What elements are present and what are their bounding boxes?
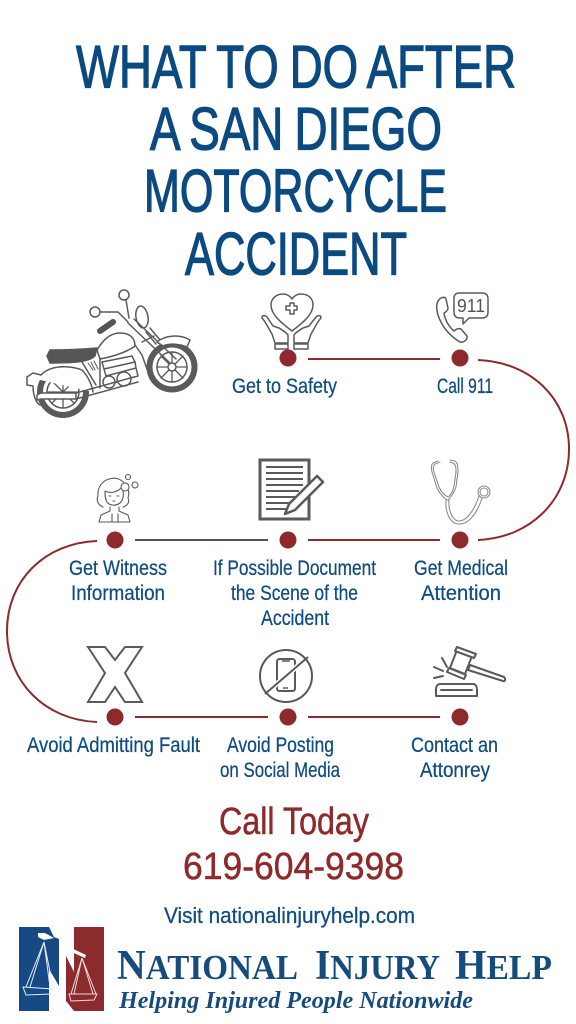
logo: national injury help xyxy=(19,927,552,1014)
label: Get to Safety xyxy=(232,375,337,398)
step: avoid admitting fault xyxy=(27,647,200,757)
step: get witness information xyxy=(69,474,167,605)
node marker xyxy=(280,708,296,726)
label xyxy=(220,734,340,782)
step: get to safety xyxy=(232,294,337,398)
step: avoid posting on social media xyxy=(220,650,340,782)
icon: stethoscope xyxy=(431,460,490,524)
logo wordmark xyxy=(117,943,552,989)
label: on Social Media xyxy=(220,759,340,782)
node marker xyxy=(280,532,296,548)
logo wordmark: INJURY xyxy=(315,943,440,989)
label: If Possible Document xyxy=(213,557,376,580)
node marker xyxy=(106,708,124,726)
logo wordmark: NATIONAL xyxy=(117,943,298,989)
logo wordmark: HELP xyxy=(455,943,552,989)
icon: no phone xyxy=(260,650,312,702)
call to action: Call Today xyxy=(219,801,369,843)
icon: motorcycle xyxy=(27,290,194,415)
icon: hands holding heart xyxy=(262,294,321,349)
title xyxy=(76,34,516,288)
call to action xyxy=(183,801,404,888)
label xyxy=(69,557,167,605)
label xyxy=(411,734,498,782)
label xyxy=(414,557,508,605)
label xyxy=(213,557,376,630)
website link: Visit nationalinjuryhelp.com xyxy=(164,903,415,928)
label: Contact an xyxy=(411,734,498,757)
icon: document and pencil xyxy=(260,460,323,519)
route connector lines xyxy=(7,359,569,722)
node marker xyxy=(280,350,296,366)
label: Accident xyxy=(261,607,329,630)
step: call 911 xyxy=(437,293,493,398)
label: Attonrey xyxy=(420,759,490,782)
label: Avoid Admitting Fault xyxy=(27,734,200,757)
logo mark xyxy=(19,927,104,1011)
label: the Scene of the xyxy=(231,582,358,605)
call to action: 619-604-9398 xyxy=(183,846,404,888)
label: Avoid Posting xyxy=(227,734,334,757)
title: MOTORCYCLE xyxy=(144,158,447,224)
icon: gavel xyxy=(434,647,505,696)
label: Information xyxy=(71,582,165,605)
node marker xyxy=(452,532,468,548)
icon: witness thinking xyxy=(97,474,138,522)
step: document the scene xyxy=(213,460,376,630)
logo tagline: Helping Injured People Nationwide xyxy=(118,988,473,1014)
step: contact an attorney xyxy=(411,647,505,782)
step: get medical attention xyxy=(414,460,508,605)
label: Get Medical xyxy=(414,557,508,580)
node marker xyxy=(452,708,468,726)
node marker xyxy=(452,350,468,366)
icon: phone with 911 bubble: 911 xyxy=(457,296,485,316)
icon: X mark xyxy=(88,647,142,702)
label: Call 911 xyxy=(437,375,493,398)
label: Attention xyxy=(421,582,501,605)
label: Get Witness xyxy=(69,557,167,580)
node marker xyxy=(106,532,124,548)
title: ACCIDENT xyxy=(185,220,407,288)
title: A SAN DIEGO xyxy=(150,96,442,162)
